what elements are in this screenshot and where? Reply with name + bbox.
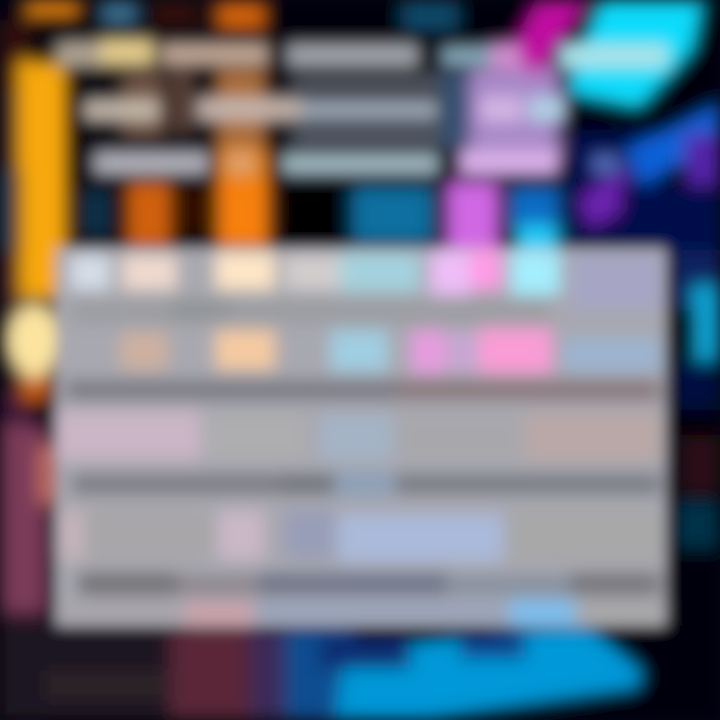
title block (illegible in reference) (55, 37, 670, 176)
glow: orange flare at left edge (4, 302, 64, 404)
panel: translucent content card (56, 248, 666, 626)
panel body rows (56, 380, 663, 626)
panel header highlights (70, 248, 662, 374)
